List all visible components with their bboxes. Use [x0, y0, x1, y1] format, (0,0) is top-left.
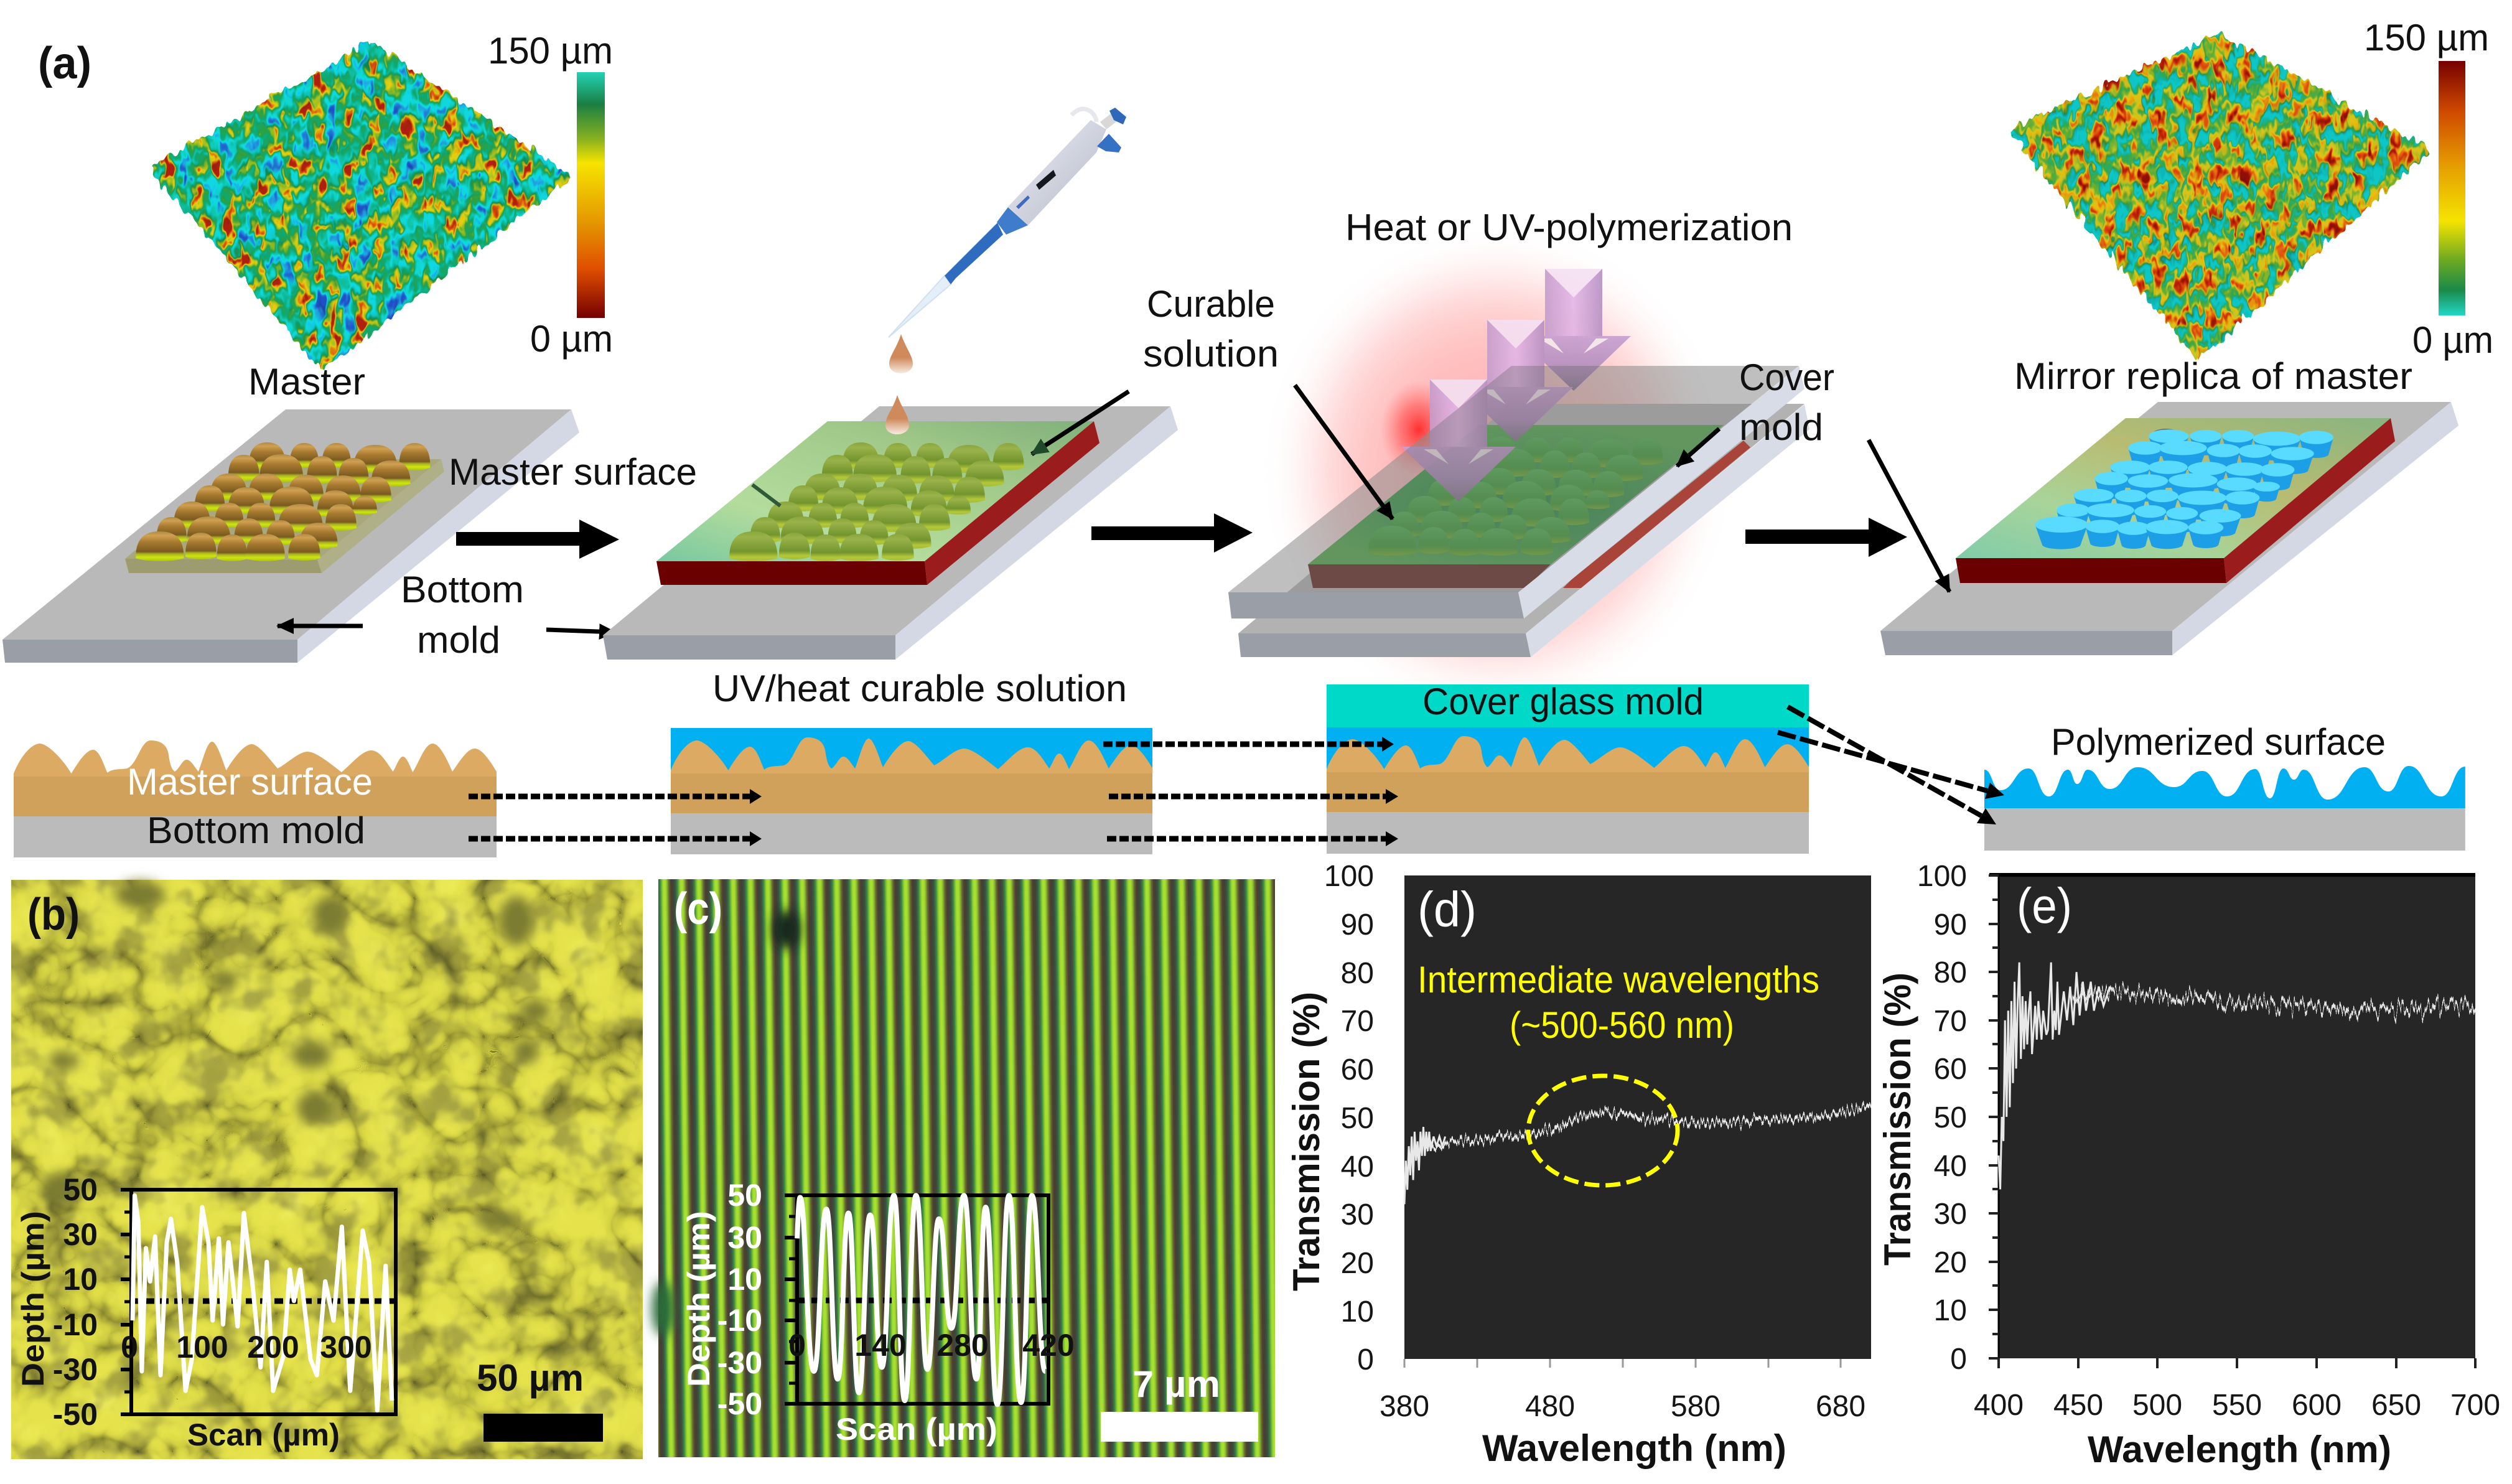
inset chart c: depth profile: 280 [936, 1328, 989, 1363]
label: Master surface: Master surface [449, 451, 697, 493]
label: Curable solution with pointer [1032, 283, 1279, 454]
panel d: transmission chart: 580 [1671, 1390, 1721, 1423]
3D surface map: master [149, 42, 573, 371]
panel e: transmission chart: 650 [2371, 1389, 2421, 1422]
panel d: transmission chart: 10 [1341, 1295, 1374, 1328]
panel c label: (c) [674, 884, 722, 934]
panel d: transmission chart: 380 [1380, 1390, 1429, 1423]
arrow: step 3 to step 4 [1745, 518, 1907, 557]
UV arrows [1401, 269, 1631, 502]
3D surface map: replica [2007, 33, 2431, 360]
inset chart b: depth profile: 50 [63, 1172, 98, 1207]
cross-section 3: cover glass mold stack: Cover glass mold [1422, 681, 1704, 722]
panel e: transmission chart: 700 [2450, 1389, 2500, 1422]
panel d: transmission chart [1286, 860, 1871, 1469]
scale bar b: 50 µm [477, 1357, 584, 1399]
callout ellipse [1528, 1076, 1678, 1185]
scale bar b [477, 1357, 603, 1442]
panel b: microscope image [11, 880, 643, 1459]
label: Bottom mold with pointers [278, 569, 615, 661]
panel d: transmission chart: 60 [1341, 1053, 1374, 1086]
panel d: transmission chart: 20 [1341, 1247, 1374, 1280]
label: Heat or UV-polymerization: Heat or UV-polymerization [1345, 207, 1793, 248]
colour bar: replica: 0 µm [2412, 319, 2493, 361]
panel e: transmission chart: Wavelength (nm) [2088, 1429, 2391, 1470]
inset chart b: depth profile: 30 [63, 1217, 98, 1252]
inset chart c: depth profile: 50 [727, 1178, 762, 1213]
panel e: transmission chart [1877, 860, 2500, 1470]
inset chart c: depth profile: -10 [717, 1303, 762, 1338]
panel d: transmission chart: 0 [1357, 1343, 1374, 1376]
inset chart c: depth profile: 140 [854, 1328, 907, 1363]
panel e: transmission chart: 20 [1934, 1246, 1967, 1279]
panel e: transmission chart: 40 [1934, 1150, 1967, 1183]
inset chart b: depth profile: Depth (µm) [16, 1211, 50, 1387]
label: Cover mold with pointer [1677, 357, 1834, 466]
annotation: intermediate wavelengths [1417, 959, 1819, 1046]
pointer into solution [1295, 385, 1393, 519]
cross-section 1: master on mold: Master surface [127, 761, 373, 803]
arrow: step 1 to step 2 [456, 520, 619, 559]
step 1: master on bottom mold [2, 409, 579, 663]
inset chart b: depth profile: 0 [121, 1330, 138, 1365]
panel e: transmission chart: 50 [1934, 1101, 1967, 1134]
label: Cover mold with pointer: mold [1739, 406, 1823, 448]
icon: pipette with drops [885, 108, 1126, 434]
cross-section 1: master on mold [14, 740, 497, 857]
panel d: transmission chart: Transmission (%) [1286, 992, 1327, 1291]
inset chart c: depth profile [681, 1178, 1075, 1447]
inset chart b: depth profile: 100 [176, 1330, 228, 1365]
panel e: transmission chart: 600 [2292, 1389, 2342, 1422]
cross-section 4: polymerized surface [1984, 766, 2465, 851]
cross-section 2: solution over master [671, 728, 1152, 854]
label: Mirror replica of master: Mirror replica of master [2014, 355, 2412, 397]
label: Cover mold with pointer: Cover [1739, 357, 1834, 398]
label: UV/heat curable solution: UV/heat curable solution [712, 668, 1127, 709]
inset chart b: depth profile: 300 [320, 1330, 372, 1365]
panel e: transmission chart: 10 [1934, 1294, 1967, 1327]
panel d label: (d) [1417, 882, 1477, 937]
transmission curve d [1404, 1106, 1871, 1204]
panel d: transmission chart: 100 [1324, 860, 1374, 893]
inset chart b: depth profile: 200 [247, 1330, 299, 1365]
cross-section 1: master on mold: Bottom mold [147, 810, 365, 851]
dashed arrows between cross-sections [469, 707, 2004, 846]
panel d: transmission chart: 30 [1341, 1198, 1374, 1231]
colour bar: master [488, 30, 613, 360]
panel d: transmission chart: Wavelength (nm) [1482, 1427, 1786, 1469]
inset chart b: depth profile: -30 [53, 1352, 98, 1387]
inset chart b: depth profile: -10 [53, 1307, 98, 1342]
inset chart c: depth profile: -50 [717, 1386, 762, 1421]
panel e: transmission chart: 100 [1917, 860, 1967, 893]
colour bar: master: 0 µm [530, 318, 613, 360]
panel e: transmission chart: 30 [1934, 1198, 1967, 1231]
colour bar: master: 150 µm [488, 30, 613, 72]
transmission curve e [1999, 963, 2475, 1189]
panel d: transmission chart: 680 [1816, 1390, 1865, 1423]
panel e: transmission chart: 80 [1934, 956, 1967, 989]
inset chart c: depth profile: 10 [727, 1262, 762, 1297]
inset chart b: depth profile: Scan (µm) [187, 1417, 340, 1452]
inset chart c: depth profile: 30 [727, 1220, 762, 1255]
panel d: transmission chart: 70 [1341, 1005, 1374, 1038]
colour bar: replica: 150 µm [2364, 17, 2489, 58]
step 2: curable solution in frame [603, 406, 1178, 660]
colour bar: replica [2364, 17, 2493, 361]
scale bar c: 7 µm [1132, 1363, 1220, 1405]
panel e: transmission chart: 60 [1934, 1053, 1967, 1086]
inset chart c: depth profile: Depth (µm) [681, 1211, 716, 1387]
label: Master: Master [248, 361, 365, 403]
inset chart b: depth profile [16, 1172, 396, 1452]
label: Curable solution with pointer: solution [1143, 333, 1279, 375]
inset chart b: depth profile: 10 [63, 1262, 98, 1297]
cross-section 3: cover glass mold stack [1327, 681, 1809, 854]
panel e: transmission chart: Transmission (%) [1877, 973, 1918, 1266]
label: Bottom mold with pointers: mold [417, 619, 500, 661]
panel e: transmission chart: 70 [1934, 1005, 1967, 1038]
inset chart c: depth profile: 0 [788, 1328, 806, 1363]
panel e: transmission chart: 90 [1934, 908, 1967, 941]
label: Bottom mold with pointers: Bottom [401, 569, 524, 610]
panel e label: (e) [2017, 878, 2072, 933]
step 3: cover mold and curing [1228, 366, 1809, 657]
panel e: transmission chart: 500 [2132, 1389, 2182, 1422]
label: Polymerized surface: Polymerized surface [2051, 721, 2386, 763]
panel d: transmission chart: 40 [1341, 1150, 1374, 1183]
pointer to bottom mold, step 4 [1869, 440, 1949, 592]
arrow: step 2 to step 3 [1091, 513, 1253, 553]
panel c: striped microscope image [652, 879, 1275, 1457]
panel e: transmission chart: 550 [2212, 1389, 2262, 1422]
panel b label: (b) [27, 890, 80, 940]
step 4: mirror replica on bottom mold [1880, 402, 2458, 655]
panel a label: (a) [38, 39, 91, 88]
panel d: transmission chart: 90 [1341, 908, 1374, 941]
inset chart c: depth profile: -30 [717, 1345, 762, 1380]
scale bar c [1101, 1363, 1258, 1442]
annotation: intermediate wavelengths: (~500-560 nm) [1510, 1004, 1734, 1046]
panel e: transmission chart: 450 [2053, 1389, 2103, 1422]
panel d: transmission chart: 50 [1341, 1102, 1374, 1135]
label: Curable solution with pointer: Curable [1147, 283, 1275, 325]
panel e: transmission chart: 400 [1974, 1389, 2024, 1422]
panel d: transmission chart: 80 [1341, 957, 1374, 990]
panel d: transmission chart: 480 [1525, 1390, 1575, 1423]
inset chart c: depth profile: Scan (µm) [836, 1412, 997, 1447]
annotation: intermediate wavelengths: Intermediate wavelengths [1417, 959, 1819, 1001]
inset chart c: depth profile: 420 [1022, 1328, 1075, 1363]
inset chart b: depth profile: -50 [53, 1397, 98, 1432]
red heat glow [1282, 247, 1712, 695]
panel e: transmission chart: 0 [1950, 1343, 1967, 1376]
